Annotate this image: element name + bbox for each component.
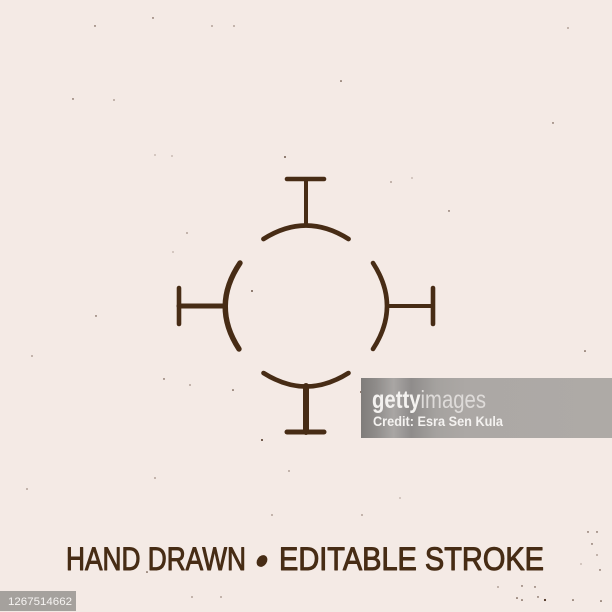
bottom marker (264, 373, 348, 432)
bullet (255, 554, 269, 568)
left marker (179, 263, 240, 349)
caption: hand drawn: HAND DRAWN (66, 541, 246, 577)
image id tag (0, 591, 76, 611)
right marker (373, 263, 433, 349)
caption: editable stroke: EDITABLE STROKE (279, 541, 544, 577)
caption (66, 541, 544, 577)
watermark logo: gettyimages (372, 386, 486, 414)
watermark credit: Credit: Esra Sen Kula (373, 413, 503, 429)
image id tag: 1267514662 (8, 596, 72, 608)
target icon (179, 179, 433, 432)
top marker (264, 179, 348, 239)
watermark panel (361, 378, 612, 438)
